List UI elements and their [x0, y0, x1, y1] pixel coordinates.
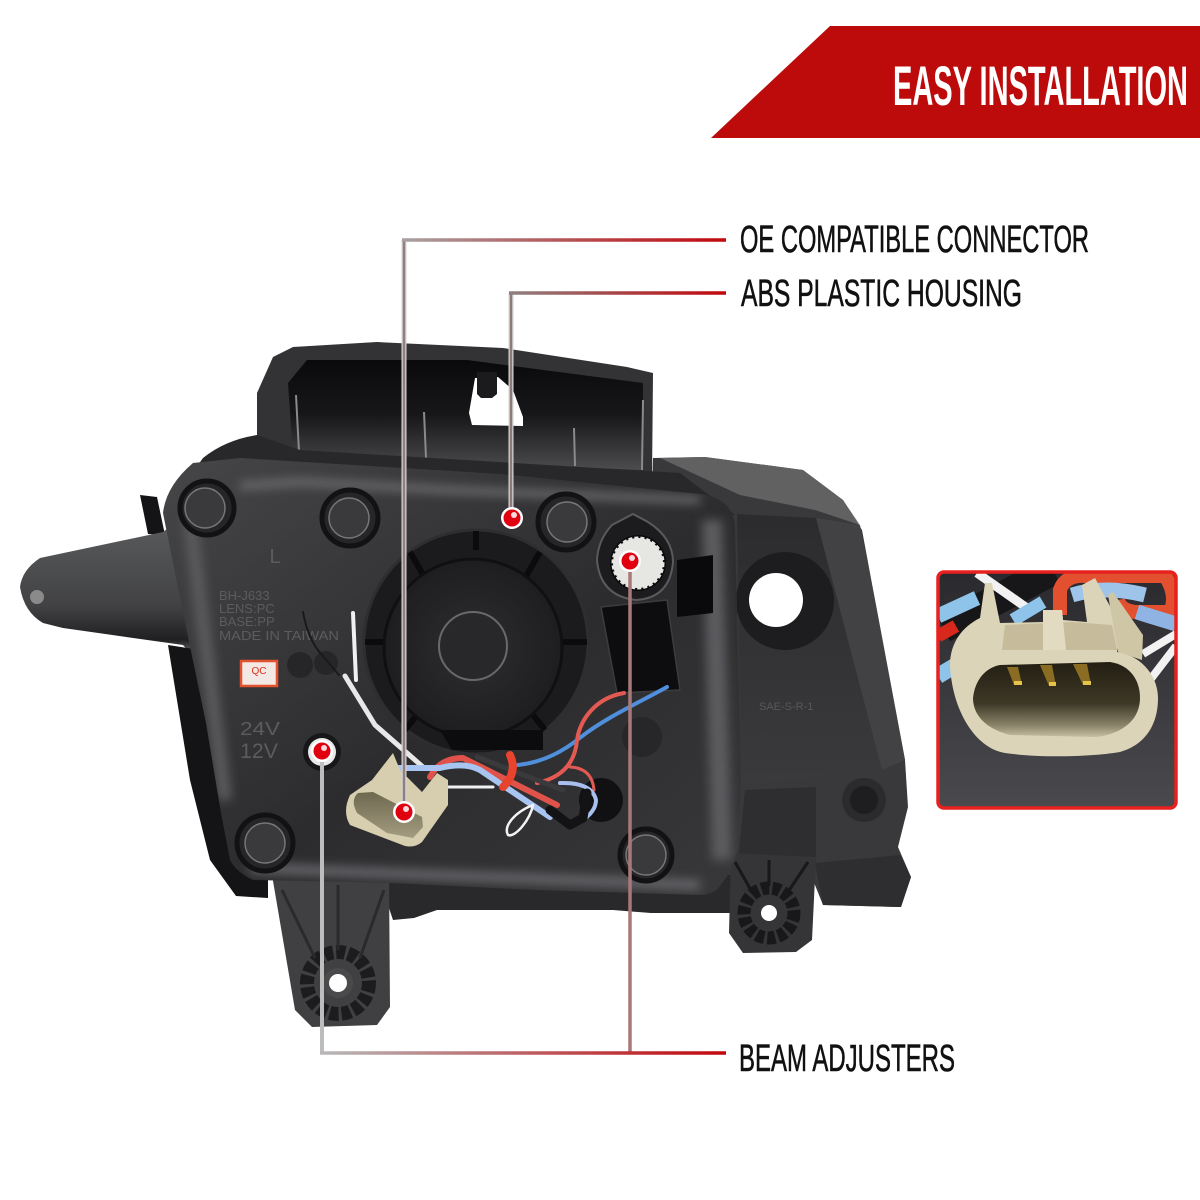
marker dots [311, 507, 641, 823]
inset pin tips [1014, 681, 1091, 686]
lower left dark flange [168, 645, 268, 898]
upper band behind plate [180, 435, 735, 515]
adjuster knob [597, 514, 673, 600]
QC sticker [241, 661, 277, 686]
QC sticker: QC [252, 666, 266, 677]
inset: connector close-up [938, 570, 1176, 808]
callout leader: beam adjusters [320, 562, 726, 1053]
plate soft highlights [190, 482, 722, 885]
wires [303, 612, 667, 835]
beige connector [346, 753, 448, 846]
dark socket and slot [579, 555, 713, 822]
inset background wires [938, 570, 1176, 680]
rubber bolts [180, 481, 672, 881]
title banner [711, 26, 1200, 138]
right side housing: SAE-S-R-1 [759, 701, 813, 713]
rear plate [163, 458, 741, 895]
left lower mount [272, 875, 390, 1027]
lower adjuster [303, 733, 341, 771]
inset connector body [950, 578, 1158, 756]
label: ABS plastic housing: ABS PLASTIC HOUSING [741, 273, 1022, 315]
headlight housing photo illustration [20, 342, 911, 1027]
plate moulded text: BH-J633 [219, 588, 270, 603]
callout leader: ABS plastic housing [509, 293, 726, 518]
inset pins [1007, 664, 1091, 686]
label: beam adjusters: BEAM ADJUSTERS [739, 1038, 955, 1080]
right side housing [640, 457, 911, 907]
plate moulded text: MADE IN TAIWAN [219, 628, 339, 643]
left mounting arm [20, 495, 196, 660]
moulded date dials [287, 651, 338, 678]
upper rear housing [257, 342, 653, 480]
plate moulded text: L [269, 546, 281, 568]
plate moulded text: LENS:PC [219, 601, 275, 616]
right lower mount [729, 853, 816, 953]
plate moulded text: BASE:PP [219, 614, 275, 629]
callout leader: OE compatible connector [402, 240, 726, 812]
plate moulded text: 24V [240, 719, 280, 739]
bulb access cap [363, 529, 589, 755]
plate moulded text [219, 546, 339, 763]
under body band [385, 875, 740, 920]
plate moulded text: 12V [240, 740, 278, 763]
inset red frame [938, 572, 1176, 808]
